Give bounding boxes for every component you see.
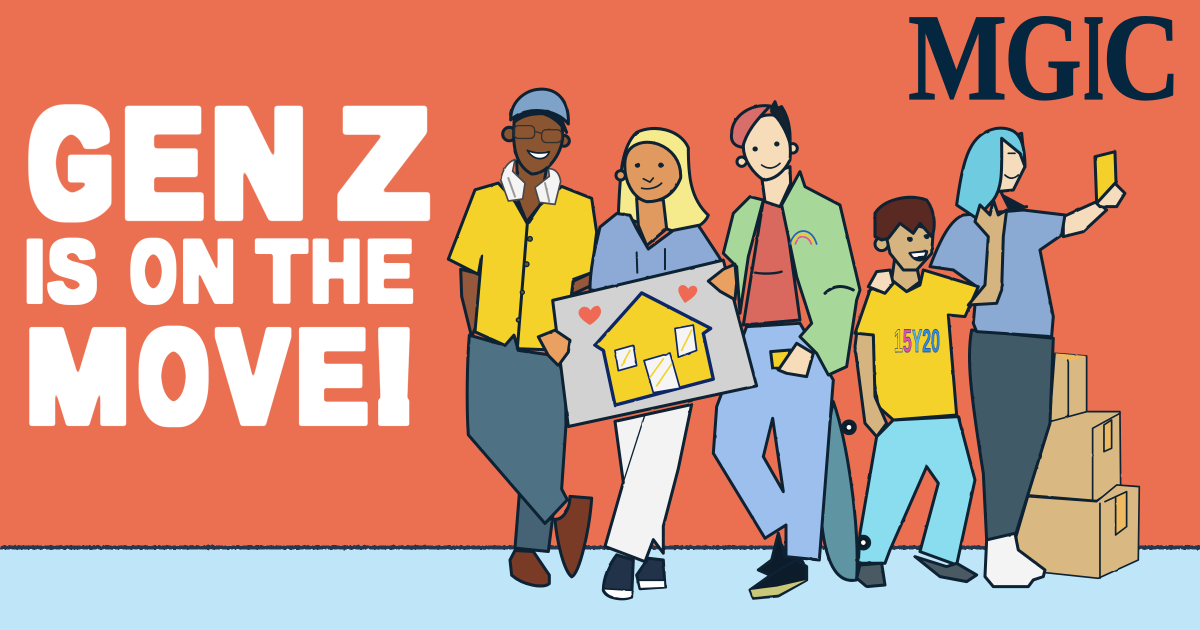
red T-shirt bbox=[743, 200, 800, 325]
rainbow patch bbox=[790, 231, 817, 244]
white trousers bbox=[605, 404, 692, 562]
selfie arm bbox=[1063, 202, 1107, 237]
right sneaker bbox=[637, 558, 665, 589]
title line: GEN Z bbox=[28, 79, 430, 247]
ear bbox=[875, 237, 888, 251]
title line: IS ON THE: T bbox=[257, 224, 307, 320]
head bbox=[743, 115, 790, 180]
light blue trousers bbox=[858, 417, 975, 565]
title line: IS ON THE: O bbox=[131, 224, 175, 320]
floor line bbox=[0, 546, 1200, 550]
smile bbox=[527, 150, 549, 159]
head bbox=[625, 142, 681, 202]
neck bbox=[517, 161, 547, 222]
group of three figures at right with boxes bbox=[713, 102, 1139, 598]
shoes bbox=[857, 563, 885, 587]
title line: IS ON THE: N bbox=[181, 224, 235, 320]
title line: MOVE!: V bbox=[219, 304, 287, 448]
pink hair bbox=[731, 106, 770, 147]
dark hair bbox=[772, 102, 790, 143]
title line: MOVE! bbox=[26, 304, 419, 448]
title line: GEN Z: N bbox=[212, 79, 306, 247]
beanie bbox=[511, 89, 568, 124]
heart left bbox=[579, 306, 601, 325]
hoodie bbox=[590, 214, 723, 300]
waving arm bbox=[968, 200, 1007, 305]
face bbox=[997, 133, 1025, 192]
hand left bbox=[538, 330, 570, 366]
arms bbox=[461, 269, 482, 337]
title line: IS ON THE bbox=[25, 224, 414, 320]
eyes and mouth bbox=[910, 237, 927, 239]
dark trousers bbox=[969, 330, 1053, 540]
hand right bbox=[708, 264, 737, 300]
MGIC logo bbox=[908, 0, 1181, 126]
title line: GEN Z: G bbox=[30, 79, 112, 247]
pair of figures at left with house sign bbox=[448, 89, 757, 599]
blue hair bbox=[957, 128, 1025, 218]
title line: GEN Z: Z bbox=[339, 79, 428, 247]
hair back bbox=[618, 128, 708, 231]
blue top bbox=[930, 210, 1065, 337]
hair bbox=[875, 197, 934, 240]
hand bbox=[778, 343, 813, 377]
neck bbox=[637, 198, 667, 246]
woman's hand on shoulder bbox=[868, 270, 893, 293]
title line: MOVE!: E bbox=[297, 304, 367, 448]
head bbox=[514, 107, 563, 174]
ears bbox=[503, 127, 516, 141]
yellow T-shirt bbox=[855, 270, 978, 420]
face features bbox=[637, 158, 661, 173]
buttons bbox=[516, 236, 532, 322]
white sneakers bbox=[985, 533, 1045, 587]
back leg bbox=[515, 486, 555, 552]
yellow shirt bbox=[448, 183, 597, 350]
title bbox=[25, 79, 430, 448]
planted brown shoe bbox=[510, 550, 549, 586]
glasses bbox=[514, 126, 562, 143]
blue jeans bbox=[713, 323, 833, 560]
green jacket left bbox=[723, 197, 763, 313]
person: man in yellow shirt bbox=[448, 89, 597, 586]
title line: MOVE!: O bbox=[140, 304, 207, 448]
person: blonde woman bbox=[590, 128, 723, 599]
skateboard wheel bbox=[857, 536, 870, 549]
shirt print: 15Y20 bbox=[894, 323, 940, 359]
back sneaker bbox=[758, 533, 803, 577]
title line: IS ON THE: S bbox=[48, 224, 97, 320]
title line: IS ON THE: H bbox=[311, 224, 362, 320]
front sneaker bbox=[750, 560, 807, 598]
gap between legs bbox=[763, 418, 783, 492]
head bbox=[885, 222, 933, 270]
ears bbox=[737, 157, 746, 166]
neck bbox=[892, 257, 920, 292]
floor bbox=[0, 547, 1200, 630]
ear bbox=[616, 171, 625, 180]
white headphones bbox=[501, 159, 561, 204]
yellow phone bbox=[1095, 152, 1117, 202]
title line: IS ON THE: E bbox=[366, 224, 413, 320]
grey board bbox=[553, 260, 757, 426]
title line: GEN Z: E bbox=[123, 79, 202, 247]
green jacket right bbox=[782, 172, 860, 375]
left sneaker bbox=[603, 555, 633, 599]
title line: IS ON THE: I bbox=[25, 224, 45, 320]
face features bbox=[755, 144, 777, 149]
neck bbox=[762, 167, 791, 207]
person: woman with blue hair taking selfie bbox=[930, 128, 1125, 587]
grey-blue trousers bbox=[467, 335, 567, 523]
title line: MOVE!: ! bbox=[369, 304, 419, 448]
skateboard bbox=[822, 402, 857, 580]
phone bbox=[771, 350, 790, 368]
house bbox=[595, 293, 713, 405]
raised brown shoe bbox=[555, 496, 592, 577]
hand bbox=[1097, 183, 1125, 207]
sign with house drawing bbox=[538, 260, 757, 426]
lowered arm bbox=[855, 333, 887, 437]
stacked cardboard boxes bbox=[1017, 353, 1139, 578]
person: skater with green jacket bbox=[713, 102, 860, 598]
heart right bbox=[678, 285, 697, 303]
person: boy in yellow shirt bbox=[855, 197, 1007, 587]
title line: MOVE!: M bbox=[26, 304, 129, 448]
